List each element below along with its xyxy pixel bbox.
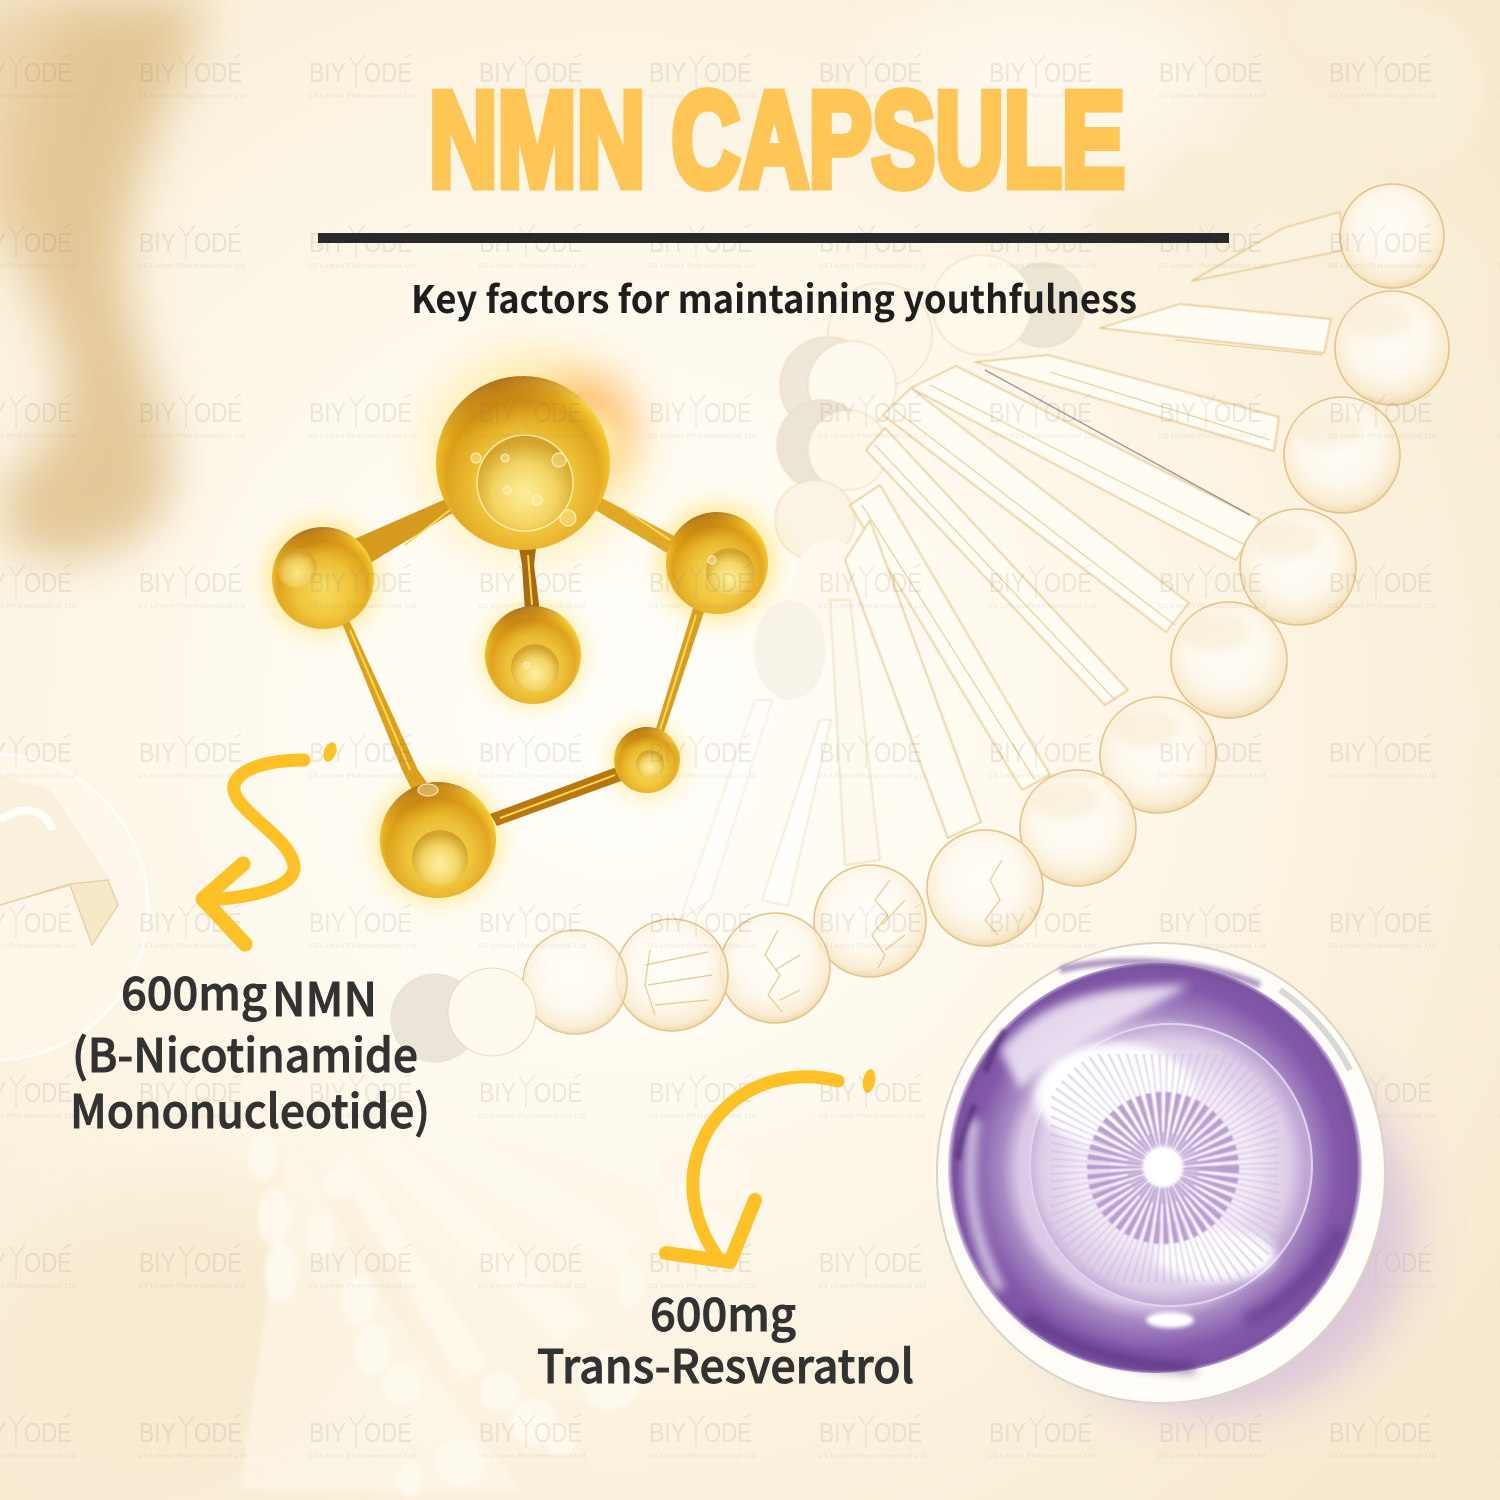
DNA rods bbox=[680, 212, 1345, 920]
title divider bbox=[318, 233, 1229, 243]
DNA spheres bbox=[523, 184, 1449, 1034]
molecule bonds bbox=[340, 497, 704, 826]
label: NMN: (B-Nicotinamide bbox=[72, 1020, 418, 1086]
label: NMN: 600mg bbox=[121, 958, 267, 1024]
label: NMN: NMN bbox=[272, 964, 377, 1030]
molecule spheres bbox=[272, 376, 768, 898]
burst bbox=[1070, 1073, 1260, 1263]
ball inner shading bbox=[1031, 300, 1412, 820]
backbone lobes bbox=[754, 243, 1170, 825]
arrow: to NMN label bbox=[203, 741, 339, 944]
label: Trans-Resveratrol: Trans-Resveratrol bbox=[537, 1331, 914, 1397]
molecule bubbles bbox=[418, 453, 716, 796]
accent dot bbox=[321, 741, 339, 763]
title: NMN CAPSULE bbox=[429, 64, 1125, 215]
glass sphere at left edge bbox=[0, 754, 148, 1060]
label: Trans-Resveratrol bbox=[537, 1279, 914, 1397]
lower ghost strand bbox=[240, 1060, 748, 1498]
label: NMN bbox=[70, 958, 430, 1142]
inner lens bbox=[1030, 1024, 1312, 1306]
ball crackle bbox=[645, 860, 1002, 1015]
purple ring bbox=[948, 963, 1362, 1373]
arrow: to Trans-Resveratrol label bbox=[666, 1068, 877, 1262]
label: Trans-Resveratrol: 600mg bbox=[650, 1279, 796, 1345]
label: NMN: Mononucleotide) bbox=[70, 1076, 430, 1142]
white rim bbox=[937, 943, 1385, 1403]
purple capsule disc bbox=[937, 943, 1415, 1415]
disc shadow bbox=[1005, 1035, 1415, 1415]
molecule glow bbox=[269, 355, 773, 900]
accent dot bbox=[861, 1068, 877, 1094]
subtitle: Key factors for maintaining youthfulness bbox=[411, 269, 1137, 324]
molecule bbox=[269, 355, 773, 900]
lens highlights bbox=[1035, 1043, 1195, 1147]
upper strand lumps bbox=[1090, 0, 1485, 370]
